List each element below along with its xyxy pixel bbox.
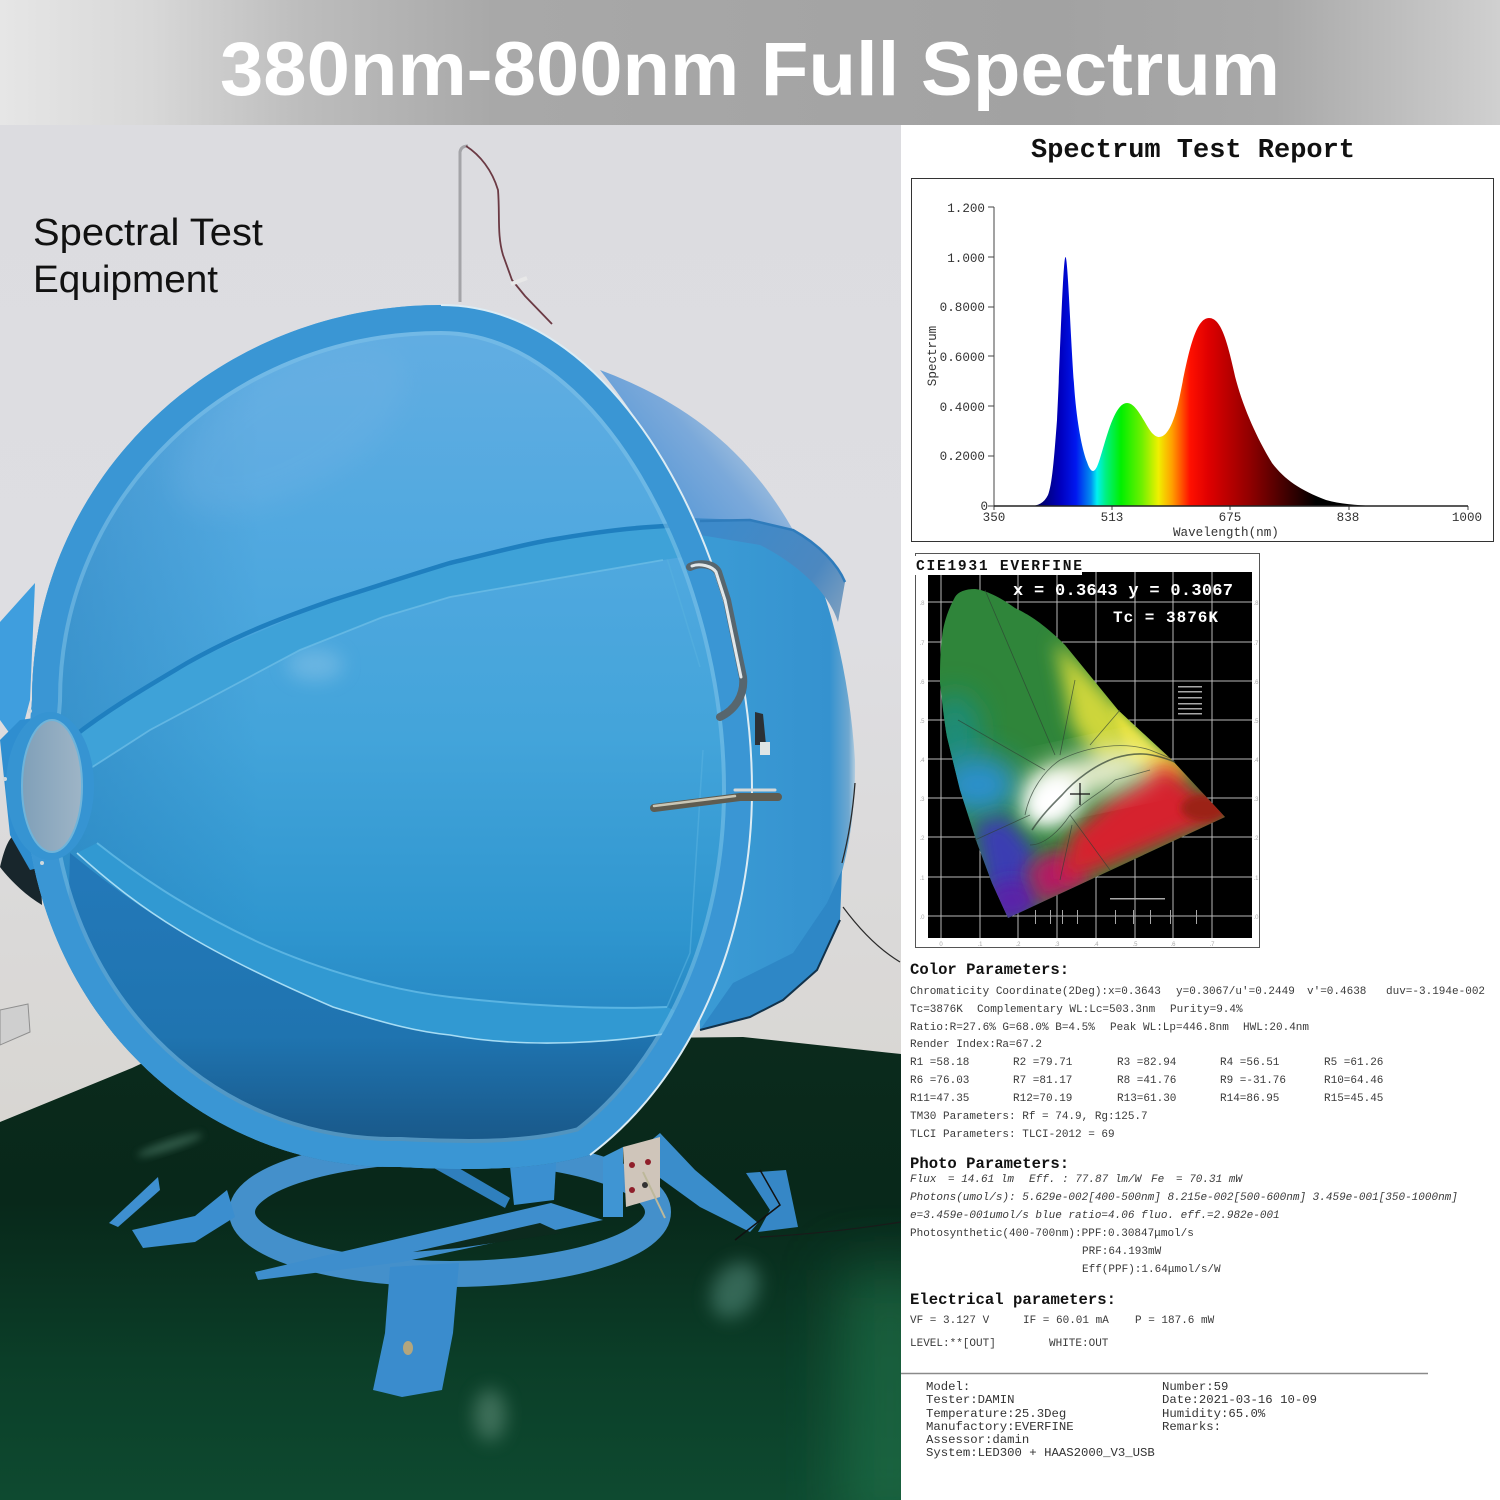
y axis labels: 1.200 [947, 202, 985, 216]
axis tick numbers: .4 [1093, 942, 1099, 948]
horseshoe colour gamut [940, 589, 1225, 918]
photo parameters: Flux [910, 1174, 937, 1186]
stand with ring and legs [109, 1133, 901, 1397]
lower hemisphere [66, 853, 658, 1169]
wall background [0, 125, 901, 1125]
photo parameters: Fe [1151, 1174, 1164, 1186]
color parameters: R10=64.46 [1324, 1075, 1383, 1087]
test record details: Humidity:65.0% [1162, 1407, 1266, 1421]
photo parameters: = 14.61 lm [948, 1174, 1014, 1186]
color parameters: y=0.3067/u'=0.2449 [1176, 986, 1295, 998]
test record details: Number:59 [1162, 1380, 1228, 1394]
axis tick numbers: .7 [1253, 641, 1259, 647]
color parameters: Purity=9.4% [1170, 1004, 1243, 1016]
electrical parameters: WHITE:OUT [1049, 1338, 1109, 1350]
photo parameters: Photo Parameters: [910, 1155, 1069, 1173]
diagram label: CIE1931 EVERFINE [916, 559, 1082, 575]
label: Spectral Test Equipment [33, 212, 263, 301]
photo parameters [910, 1155, 1458, 1276]
door latch [654, 790, 778, 808]
photo parameters: PRF:64.193mW [1082, 1246, 1162, 1258]
sphere body [30, 305, 726, 1169]
color parameters: v'=0.4638 [1307, 986, 1366, 998]
x axis labels: 1000 [1452, 511, 1482, 525]
small legend blocks [1035, 686, 1202, 924]
color parameters: R11=47.35 [910, 1093, 969, 1105]
electrical parameters: LEVEL:**[OUT] [910, 1338, 996, 1350]
test record details: Temperature:25.3Deg [926, 1407, 1066, 1421]
chromaticity readout: Tc = 3876K [1113, 609, 1218, 627]
axis tick numbers: 0 [939, 942, 943, 948]
color parameters: Tc=3876K [910, 1004, 963, 1016]
axis tick numbers: .8 [1253, 601, 1259, 607]
separator [901, 1372, 1428, 1374]
axis tick numbers: .1 [919, 876, 925, 882]
axis tick numbers: .5 [919, 719, 925, 725]
electrical parameters: VF = 3.127 V [910, 1315, 990, 1327]
axis tick numbers: .7 [919, 641, 925, 647]
test record details: Remarks: [1162, 1420, 1221, 1434]
color parameters: HWL:20.4nm [1243, 1022, 1309, 1034]
report panel [901, 125, 1500, 1500]
test record details: Assessor:damin [926, 1433, 1029, 1447]
axis tick numbers: .5 [1253, 719, 1259, 725]
axis tick numbers [919, 601, 1259, 948]
electrical parameters: Electrical parameters: [910, 1291, 1116, 1309]
chromaticity grid [928, 572, 1252, 938]
axis tick numbers: .7 [1209, 942, 1215, 948]
y axis labels: 0.4000 [940, 401, 985, 415]
color parameters: R5 =61.26 [1324, 1057, 1383, 1069]
y axis labels: 0.8000 [940, 301, 985, 315]
back hemisphere [600, 370, 900, 1030]
axis tick numbers: .6 [1253, 680, 1259, 686]
spectrum chart [912, 178, 1494, 542]
axis tick numbers: .3 [1054, 942, 1060, 948]
color parameters: R8 =41.76 [1117, 1075, 1176, 1087]
y axis labels: 0.6000 [940, 351, 985, 365]
x axis labels: 675 [1219, 511, 1241, 525]
small latch device [755, 712, 770, 755]
observation port disc [3, 709, 94, 865]
report title: Spectrum Test Report [1031, 136, 1355, 166]
test point crosshair [1070, 783, 1090, 805]
support rod and wire [460, 146, 552, 324]
chromaticity readout [1013, 582, 1233, 627]
axis tick numbers: .1 [1253, 876, 1259, 882]
axis tick numbers: .3 [919, 797, 925, 803]
color parameters: duv=-3.194e-002 [1386, 986, 1485, 998]
color parameters: R7 =81.17 [1013, 1075, 1072, 1087]
axis tick numbers: .0 [919, 915, 925, 921]
color parameters: R12=70.19 [1013, 1093, 1072, 1105]
color parameters: TLCI Parameters: TLCI-2012 = 69 [910, 1129, 1115, 1141]
photo panel: spectral test equipment [0, 125, 940, 1500]
x axis title: Wavelength(nm) [1173, 526, 1279, 540]
left flap and port ring [0, 583, 90, 870]
chromaticity readout: x = 0.3643 y = 0.3067 [1013, 582, 1233, 601]
header banner [0, 0, 1500, 125]
axis tick numbers: .0 [1253, 915, 1259, 921]
x axis labels: 513 [1101, 511, 1123, 525]
color parameters: R14=86.95 [1220, 1093, 1279, 1105]
photo parameters: = 70.31 mW [1176, 1174, 1243, 1186]
lamp behind sphere [0, 836, 42, 905]
title: 380nm-800nm Full Spectrum [220, 27, 1280, 112]
axis tick numbers: .6 [1170, 942, 1176, 948]
electrical parameters [910, 1291, 1215, 1350]
y axis labels: 0.2000 [940, 450, 985, 464]
CIE1931 chromaticity diagram [915, 554, 1260, 948]
y axis title: Spectrum [926, 326, 940, 386]
photo parameters: Eff(PPF):1.64μmol/s/W [1082, 1264, 1221, 1276]
spectrum curve [1030, 257, 1375, 506]
rim band [25, 305, 752, 1169]
y axis labels: 0 [980, 500, 988, 514]
test record details [926, 1380, 1317, 1460]
color parameters: R9 =-31.76 [1220, 1075, 1286, 1087]
axis tick numbers: .4 [1253, 758, 1259, 764]
color parameters: Render Index:Ra=67.2 [910, 1039, 1042, 1051]
x axis labels [983, 511, 1482, 525]
floor [0, 1037, 940, 1500]
axis tick numbers: .4 [919, 758, 925, 764]
color parameters [910, 961, 1485, 1141]
electrical parameters: IF = 60.01 mA [1023, 1315, 1109, 1327]
white rim edge line [441, 305, 752, 1155]
electrical parameters: P = 187.6 mW [1135, 1315, 1215, 1327]
color parameters: R13=61.30 [1117, 1093, 1176, 1105]
Planckian locus and colour region lines [958, 590, 1175, 880]
label: Spectral Test Equipment: Equipment [33, 259, 218, 301]
photo parameters: e=3.459e-001umol/s blue ratio=4.06 fluo. eff.=2.982e-001 [910, 1210, 1280, 1222]
test record details: Manufactory:EVERFINE [926, 1420, 1074, 1434]
axis tick numbers: .2 [919, 836, 925, 842]
color parameters: TM30 Parameters: Rf = 74.9, Rg:125.7 [910, 1111, 1148, 1123]
x axis labels: 350 [983, 511, 1005, 525]
axis tick numbers: .6 [919, 680, 925, 686]
color parameters: Chromaticity Coordinate(2Deg):x=0.3643 [910, 986, 1161, 998]
test record details: Tester:DAMIN [926, 1393, 1015, 1407]
color parameters: R3 =82.94 [1117, 1057, 1177, 1069]
test record details: Date:2021-03-16 10-09 [1162, 1393, 1317, 1407]
door handle [690, 564, 743, 717]
axis tick numbers: .8 [919, 601, 925, 607]
axis tick numbers: .5 [1132, 942, 1138, 948]
axis tick numbers: .2 [1253, 836, 1259, 842]
axis tick numbers: .2 [1015, 942, 1021, 948]
wall outlet [0, 1004, 30, 1045]
axes [988, 207, 1468, 510]
color parameters: R4 =56.51 [1220, 1057, 1280, 1069]
test record details: System:LED300 + HAAS2000_V3_USB [926, 1446, 1155, 1460]
color parameters: Peak WL:Lp=446.8nm [1110, 1022, 1229, 1034]
color parameters: R2 =79.71 [1013, 1057, 1073, 1069]
color parameters: Complementary WL:Lc=503.3nm [977, 1004, 1156, 1016]
color parameters: R15=45.45 [1324, 1093, 1383, 1105]
test record details: Model: [926, 1380, 970, 1394]
axis tick numbers: .1 [977, 942, 983, 948]
photo parameters: Eff. : 77.87 lm/W [1029, 1174, 1143, 1186]
color parameters: Ratio:R=27.6% G=68.0% B=4.5% [910, 1022, 1095, 1034]
color parameters: R6 =76.03 [910, 1075, 969, 1087]
label: Spectral Test Equipment: Spectral Test [33, 212, 263, 254]
axis tick numbers: .3 [1253, 797, 1259, 803]
y axis labels [940, 202, 988, 514]
x axis labels: 838 [1337, 511, 1359, 525]
photo parameters: Photons(umol/s): 5.629e-002[400-500nm] 8.215e-002[500-600nm] 3.459e-001[350-1000nm] [910, 1192, 1458, 1204]
y axis labels: 1.000 [947, 252, 985, 266]
photo parameters: Photosynthetic(400-700nm):PPF:0.30847μmol/s [910, 1228, 1194, 1240]
color parameters: R1 =58.18 [910, 1057, 969, 1069]
upper band [78, 524, 678, 768]
lower band [76, 750, 704, 1044]
color parameters: Color Parameters: [910, 961, 1069, 979]
